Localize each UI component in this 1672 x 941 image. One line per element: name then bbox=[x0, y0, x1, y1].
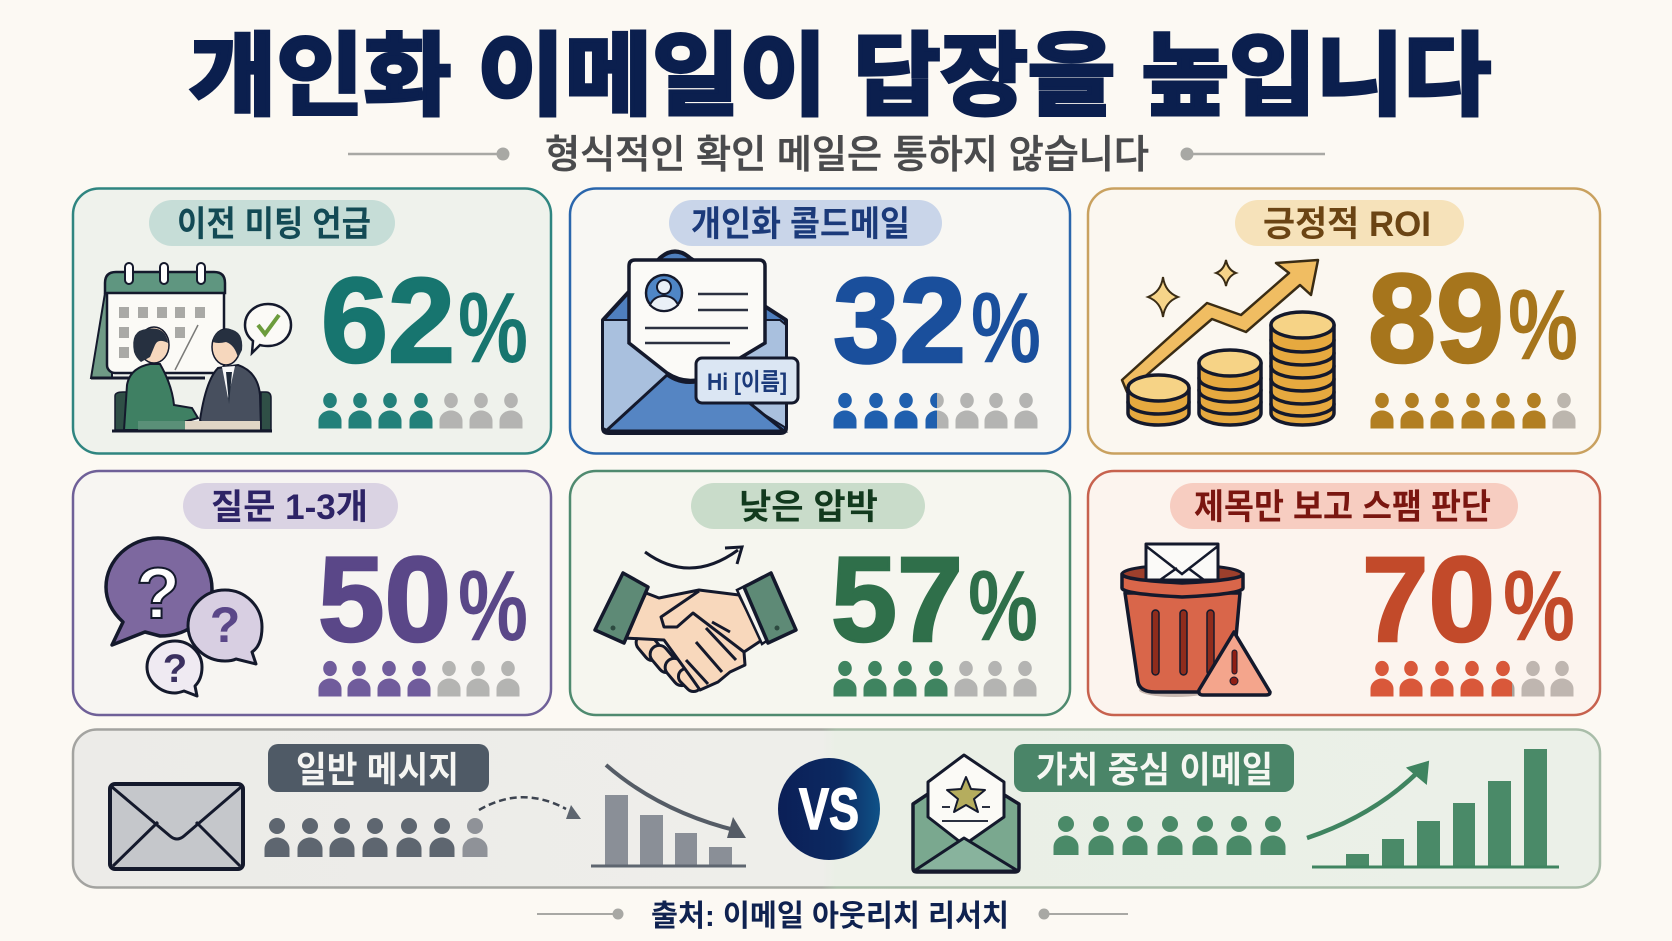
pictogram row grey bbox=[264, 818, 488, 857]
pill heading: 제목만 보고 스팸 판단 bbox=[1194, 488, 1491, 527]
icon: question bubbles: ? bbox=[163, 647, 187, 691]
icon: question bubbles: ? bbox=[136, 554, 180, 634]
statistic 57% bbox=[831, 531, 1038, 667]
icon: trash can with warning bbox=[1122, 544, 1270, 697]
pill heading: 개인화 콜드메일 bbox=[691, 205, 910, 244]
pictogram row green bbox=[1054, 816, 1286, 855]
subtitle with side rules: 형식적인 확인 메일은 통하지 않습니다 bbox=[545, 134, 1149, 177]
pill heading bbox=[1235, 200, 1464, 246]
statistic 70%: 70 bbox=[1362, 531, 1495, 667]
icon: value envelope bbox=[913, 755, 1019, 872]
statistic 32% bbox=[833, 252, 1041, 388]
statistic 62%: 62 bbox=[321, 252, 455, 388]
panel: 제목만 보고 스팸 판단 70% bbox=[1088, 471, 1600, 715]
pill: 가치 중심 이메일: 가치 중심 이메일 bbox=[1036, 749, 1273, 790]
pictogram row bbox=[834, 393, 1038, 428]
pill: 일반 메시지: 일반 메시지 bbox=[296, 749, 459, 790]
icon: question bubbles bbox=[106, 538, 262, 696]
statistic 32%: 32 bbox=[833, 252, 966, 388]
pictogram row bbox=[318, 661, 520, 696]
falling bar chart bbox=[591, 765, 746, 866]
title: 개인화 이메일이 답장을 높입니다 bbox=[189, 27, 1491, 127]
pictogram row bbox=[1370, 661, 1574, 696]
statistic 70% bbox=[1362, 531, 1575, 667]
source footer bbox=[537, 900, 1128, 933]
pill: 일반 메시지 bbox=[268, 744, 489, 792]
icon: handshake bbox=[595, 547, 796, 695]
VS badge bbox=[778, 758, 880, 860]
pill heading: 긍정적 ROI bbox=[1263, 205, 1431, 244]
statistic 57%: % bbox=[968, 550, 1038, 662]
icon: personalized envelope: Hi [이름] bbox=[707, 369, 787, 396]
statistic 50% bbox=[318, 531, 528, 667]
icon: calendar and meeting bbox=[91, 263, 291, 431]
VS badge: VS bbox=[799, 777, 859, 842]
pictogram row bbox=[834, 661, 1036, 696]
statistic 89%: 89 bbox=[1368, 248, 1504, 389]
panel: 이전 미팅 언급 62% bbox=[73, 188, 551, 454]
pill heading: 질문 1-3개 bbox=[211, 488, 368, 527]
rising bar chart bbox=[1307, 749, 1559, 867]
statistic 32%: % bbox=[971, 272, 1041, 384]
pictogram row bbox=[1370, 393, 1576, 428]
statistic 89% bbox=[1368, 248, 1578, 389]
pill heading: 낮은 압박 bbox=[739, 488, 878, 527]
icon: plain envelope bbox=[110, 784, 243, 869]
panel: 질문 1-3개 50% bbox=[73, 471, 551, 715]
statistic 57%: 57 bbox=[831, 531, 963, 667]
statistic 62% bbox=[321, 252, 528, 388]
source footer: 출처: 이메일 아웃리치 리서치 bbox=[651, 900, 1009, 933]
statistic 89%: % bbox=[1508, 269, 1578, 381]
pill heading bbox=[183, 483, 398, 529]
panel: comparison strip bbox=[73, 730, 1600, 888]
statistic 50%: 50 bbox=[318, 531, 451, 667]
statistic 50%: % bbox=[458, 550, 528, 662]
dashed arrow bbox=[479, 797, 581, 819]
panel: 긍정적 ROI 89% bbox=[1088, 188, 1600, 454]
statistic 62%: % bbox=[458, 272, 528, 384]
statistic 70%: % bbox=[1503, 550, 1575, 662]
pictogram row bbox=[318, 393, 522, 428]
panel: 개인화 콜드메일 32% bbox=[570, 188, 1070, 454]
panel: 낮은 압박 57% bbox=[570, 471, 1070, 715]
subtitle with side rules bbox=[348, 134, 1325, 177]
pill heading: 이전 미팅 언급 bbox=[177, 205, 371, 244]
pill heading bbox=[691, 483, 925, 529]
icon: personalized envelope bbox=[603, 252, 798, 433]
icon: rising arrow and coins bbox=[1122, 260, 1334, 425]
icon: question bubbles: ? bbox=[210, 597, 240, 653]
